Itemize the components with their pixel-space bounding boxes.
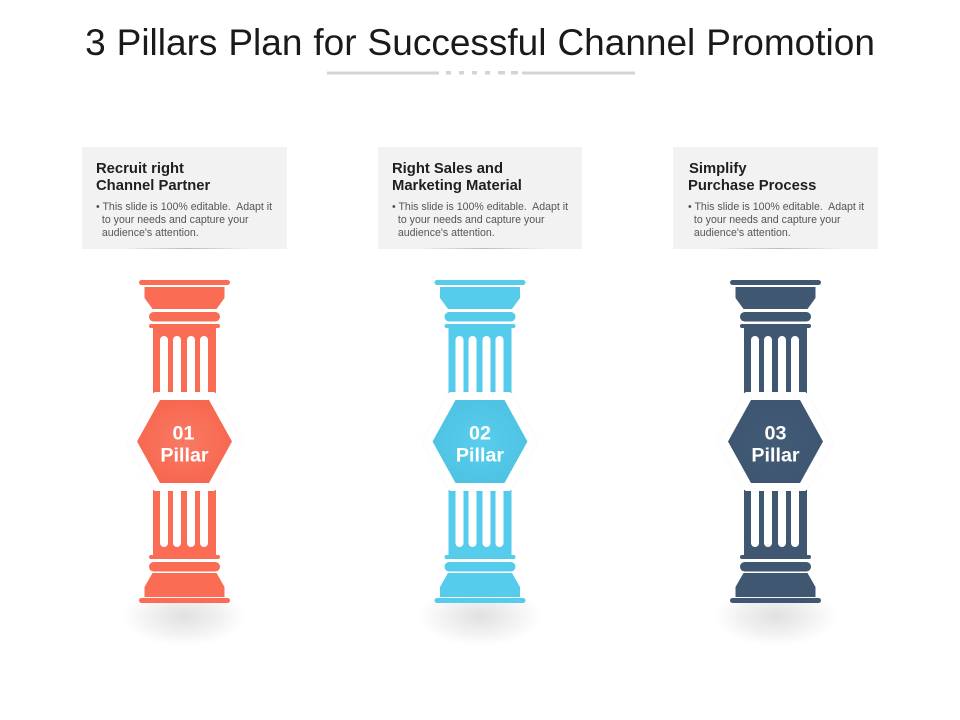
panel: simplify purchase process: Purchase Process — [688, 178, 816, 194]
capital — [434, 280, 526, 328]
panel: recruit right channel partner: • This slide is 100% editable. Adapt it — [96, 201, 272, 213]
panel: recruit right channel partner: to your needs and capture your — [102, 214, 249, 226]
hexagon halo — [423, 392, 537, 491]
pillar 2: Pillar — [456, 444, 504, 466]
pillar 3 — [714, 280, 838, 646]
base — [139, 555, 230, 603]
lower shaft — [744, 490, 807, 556]
panel: right sales and marketing material: to your needs and capture your — [398, 214, 545, 226]
panel: recruit right channel partner: audience's attention. — [102, 227, 199, 239]
hexagon label: 01 — [173, 422, 194, 444]
hexagon — [137, 400, 232, 483]
capital — [730, 280, 821, 328]
lower shaft — [448, 490, 512, 556]
hexagon label: 02 — [469, 422, 491, 444]
capital — [139, 280, 230, 328]
panel: simplify purchase process: Simplify — [689, 161, 747, 177]
panel: right sales and marketing material: Right Sales and — [392, 161, 503, 177]
panel: simplify purchase process: • This slide is 100% editable. Adapt it — [688, 201, 864, 213]
lower shaft — [153, 490, 216, 556]
upper shaft — [744, 328, 807, 393]
panel: right sales and marketing material: • This slide is 100% editable. Adapt it — [392, 201, 568, 213]
title: 3 Pillars Plan for Successful Channel Promotion — [85, 22, 875, 63]
title divider — [327, 71, 635, 74]
panel: simplify purchase process: audience's attention. — [694, 227, 791, 239]
panel: right sales and marketing material — [378, 147, 582, 249]
shadow — [122, 586, 246, 646]
hexagon label: 03 — [765, 422, 786, 444]
panel: right sales and marketing material: audience's attention. — [398, 227, 495, 239]
hexagon — [432, 400, 528, 483]
hexagon — [728, 400, 823, 483]
shadow — [714, 586, 838, 646]
pillar 2 — [418, 280, 542, 646]
panel: recruit right channel partner — [82, 147, 287, 249]
shadow — [418, 586, 542, 646]
upper shaft — [153, 328, 216, 393]
pillar 3: Pillar — [751, 444, 800, 466]
pillar 1 — [122, 280, 246, 646]
panel: simplify purchase process: to your needs and capture your — [694, 214, 841, 226]
hexagon halo — [128, 392, 242, 491]
base — [730, 555, 821, 603]
panel: recruit right channel partner: Channel Partner — [96, 178, 210, 194]
base — [434, 555, 526, 603]
panel: right sales and marketing material: Marketing Material — [392, 178, 522, 194]
panel: simplify purchase process — [673, 147, 878, 249]
panel: recruit right channel partner: Recruit right — [96, 161, 184, 177]
hexagon halo — [718, 392, 832, 491]
upper shaft — [448, 328, 512, 393]
pillar 1: Pillar — [160, 444, 209, 466]
